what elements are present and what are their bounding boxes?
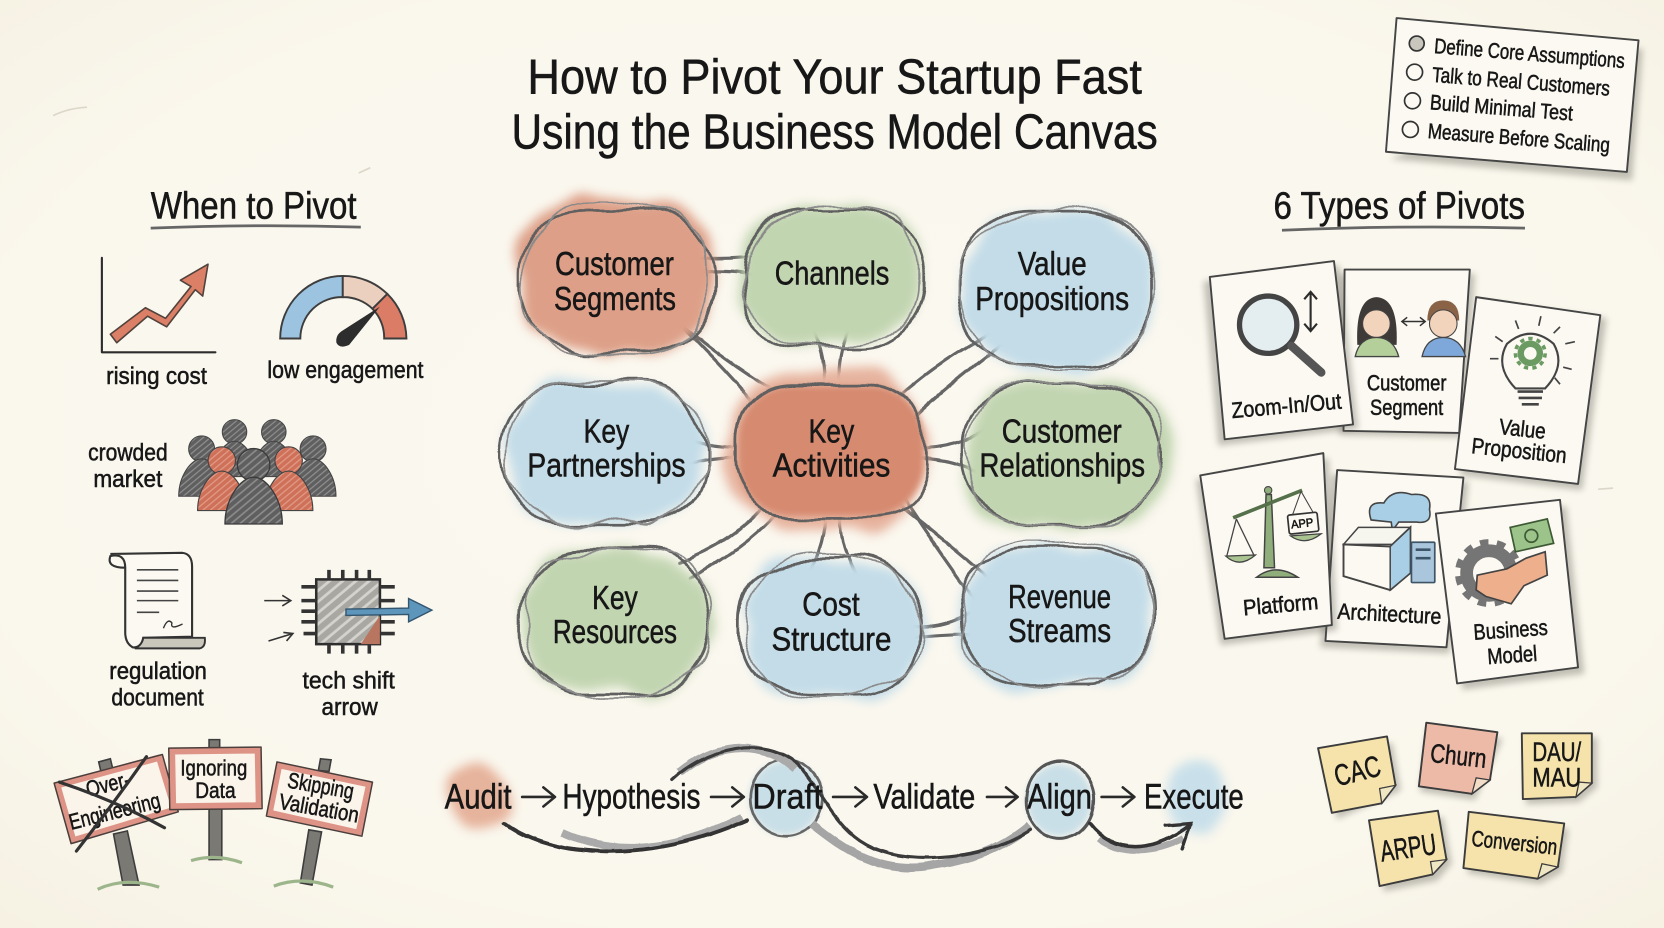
- card: zoom-in/out: [1203, 261, 1358, 446]
- sticky: DAU/MAU: DAU/: [1532, 737, 1582, 767]
- sign: over-engineering: [54, 754, 178, 889]
- sign: skipping validation: Validation: [277, 789, 361, 828]
- icon: crowded market: [88, 420, 336, 524]
- block: key partnerships: Key: [584, 413, 630, 450]
- card: platform: APP: [1290, 516, 1314, 531]
- step labels with arrows: Execute: [1144, 778, 1244, 817]
- card: value proposition: Value: [1498, 414, 1547, 444]
- card: customer segment: Segment: [1370, 395, 1444, 420]
- sticky: conversion: Conversion: [1470, 826, 1558, 860]
- card: platform: [1196, 453, 1337, 645]
- block: cost structure: [741, 558, 921, 698]
- block: customer relationships: Customer: [1002, 413, 1122, 450]
- panel: metrics sticky notes: [1318, 723, 1597, 891]
- sticky: ARPU: ARPU: [1378, 828, 1438, 869]
- step labels with arrows: Validate: [873, 778, 975, 817]
- sticky: churn: [1419, 723, 1503, 800]
- sign: ignoring data: Data: [195, 778, 236, 803]
- card: value proposition: Proposition: [1470, 433, 1568, 468]
- block: value propositions: Value: [1018, 245, 1087, 282]
- card: customer segment: Customer: [1367, 371, 1447, 396]
- block: value propositions: Propositions: [975, 280, 1129, 317]
- icon: crowded market: crowded: [88, 440, 168, 467]
- checklist items: Build Minimal Test: [1429, 91, 1574, 126]
- title: [512, 50, 1158, 160]
- title: Using the Business Model Canvas: [512, 106, 1158, 160]
- sticky: churn: Churn: [1429, 738, 1488, 774]
- card: value proposition: [1455, 297, 1607, 490]
- sticky: DAU/MAU: [1522, 733, 1597, 804]
- connectors between canvas blocks: [669, 255, 1008, 639]
- process flow: audit to execute: [445, 747, 1244, 867]
- block: key resources: [521, 548, 710, 694]
- checklist items: Measure Before Scaling: [1427, 120, 1611, 157]
- card: business model: Model: [1486, 641, 1538, 669]
- block: customer segments: Segments: [554, 280, 676, 317]
- card: zoom-in/out: Zoom-In/Out: [1230, 389, 1343, 423]
- icon: regulation document: regulation: [109, 658, 207, 685]
- icon: regulation document: document: [111, 685, 204, 712]
- block: customer relationships: Relationships: [980, 446, 1145, 483]
- icon: rising cost chart: [102, 258, 215, 390]
- block: customer segments: [516, 197, 713, 354]
- card: platform: Platform: [1242, 589, 1319, 620]
- panel: when to pivot: [88, 185, 432, 721]
- icon: low engagement gauge: low engagement: [267, 357, 424, 384]
- block: key activities: Key: [809, 413, 855, 450]
- sticky: CAC: CAC: [1331, 750, 1384, 793]
- sign: over-engineering: Over-: [83, 767, 133, 802]
- block: customer relationships: [964, 380, 1165, 528]
- diagram: business model canvas: [501, 197, 1165, 698]
- sweeping flow curves: [505, 747, 1191, 867]
- block: cost structure: Cost: [802, 585, 860, 622]
- panel: 6 types of pivots: [1196, 185, 1607, 690]
- icon: low engagement gauge: [267, 276, 424, 384]
- block: key activities: [724, 374, 928, 531]
- step labels with arrows: Hypothesis: [562, 778, 700, 817]
- heading: 6 types of pivots: 6 Types of Pivots: [1273, 185, 1525, 228]
- step labels with arrows: Audit: [445, 778, 512, 817]
- sign: ignoring data: [169, 740, 262, 863]
- sign: skipping validation: [266, 759, 372, 887]
- block: channels: Channels: [775, 254, 889, 291]
- sticky: DAU/MAU: MAU: [1532, 762, 1581, 792]
- sign: ignoring data: Ignoring: [180, 756, 247, 781]
- checklist note: [1386, 18, 1643, 180]
- sticky: conversion: [1463, 812, 1568, 884]
- icon: crowded market: market: [93, 466, 163, 493]
- sticky: CAC: [1318, 736, 1401, 819]
- step labels with arrows: Draft: [752, 778, 823, 817]
- step labels with arrows: Align: [1027, 778, 1092, 817]
- step labels with arrows: [445, 778, 1244, 817]
- block: key activities: Activities: [773, 446, 890, 483]
- card: architecture: [1320, 470, 1469, 654]
- block: key partnerships: [501, 382, 708, 526]
- block: channels: [742, 204, 922, 346]
- heading: when to pivot: When to Pivot: [151, 185, 357, 228]
- icon: tech shift chip with arrow: [264, 570, 432, 721]
- sign: skipping validation: Skipping: [286, 768, 356, 804]
- block: cost structure: Structure: [772, 621, 891, 658]
- block: revenue streams: Streams: [1008, 612, 1111, 649]
- block: key resources: Resources: [553, 613, 677, 650]
- watercolor step markers: [446, 761, 1226, 836]
- card: business model: [1436, 500, 1584, 690]
- block: key partnerships: Partnerships: [527, 446, 686, 483]
- block: revenue streams: Revenue: [1008, 578, 1111, 615]
- icon: regulation document: [109, 553, 207, 712]
- checklist items: [1402, 35, 1626, 157]
- icon: tech shift chip with arrow: arrow: [322, 694, 378, 721]
- title: How to Pivot Your Startup Fast: [527, 50, 1142, 104]
- icon: rising cost chart: rising cost: [106, 363, 207, 390]
- block: revenue streams: [959, 544, 1156, 690]
- panel: warning signs: [54, 740, 372, 889]
- block: key resources: Key: [592, 579, 638, 616]
- card: architecture: Architecture: [1337, 599, 1442, 629]
- card: customer segment: [1339, 270, 1475, 437]
- sticky: ARPU: [1369, 811, 1452, 891]
- card: business model: Business: [1473, 615, 1548, 645]
- icon: tech shift chip with arrow: tech shift: [302, 668, 395, 695]
- checklist items: Talk to Real Customers: [1431, 64, 1611, 101]
- sign: over-engineering: Engineering: [66, 788, 163, 835]
- block: customer segments: Customer: [555, 245, 674, 282]
- block: value propositions: [958, 208, 1154, 369]
